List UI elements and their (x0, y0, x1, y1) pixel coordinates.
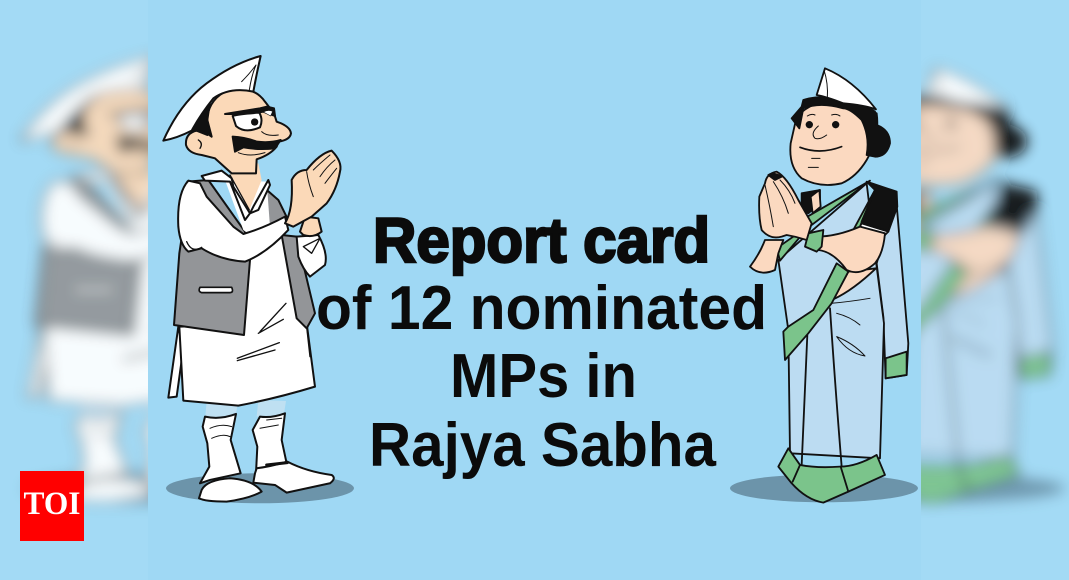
logo: TOI (20, 471, 84, 541)
heading line: MPs in: MPs in (450, 342, 637, 411)
illustration: politician woman greeting (730, 68, 918, 503)
illustration: politician man greeting (163, 56, 354, 503)
heading line: Report card: Report card (373, 206, 710, 276)
heading line: of 12 nominated: of 12 nominated (316, 274, 767, 343)
blurred left backdrop figure (15, 50, 148, 512)
central panel (148, 0, 921, 580)
heading line: Rajya Sabha: Rajya Sabha (369, 411, 716, 480)
logo: TOI: TOI (24, 486, 80, 522)
blurred right backdrop figure (921, 62, 1068, 512)
heading text (316, 206, 767, 480)
